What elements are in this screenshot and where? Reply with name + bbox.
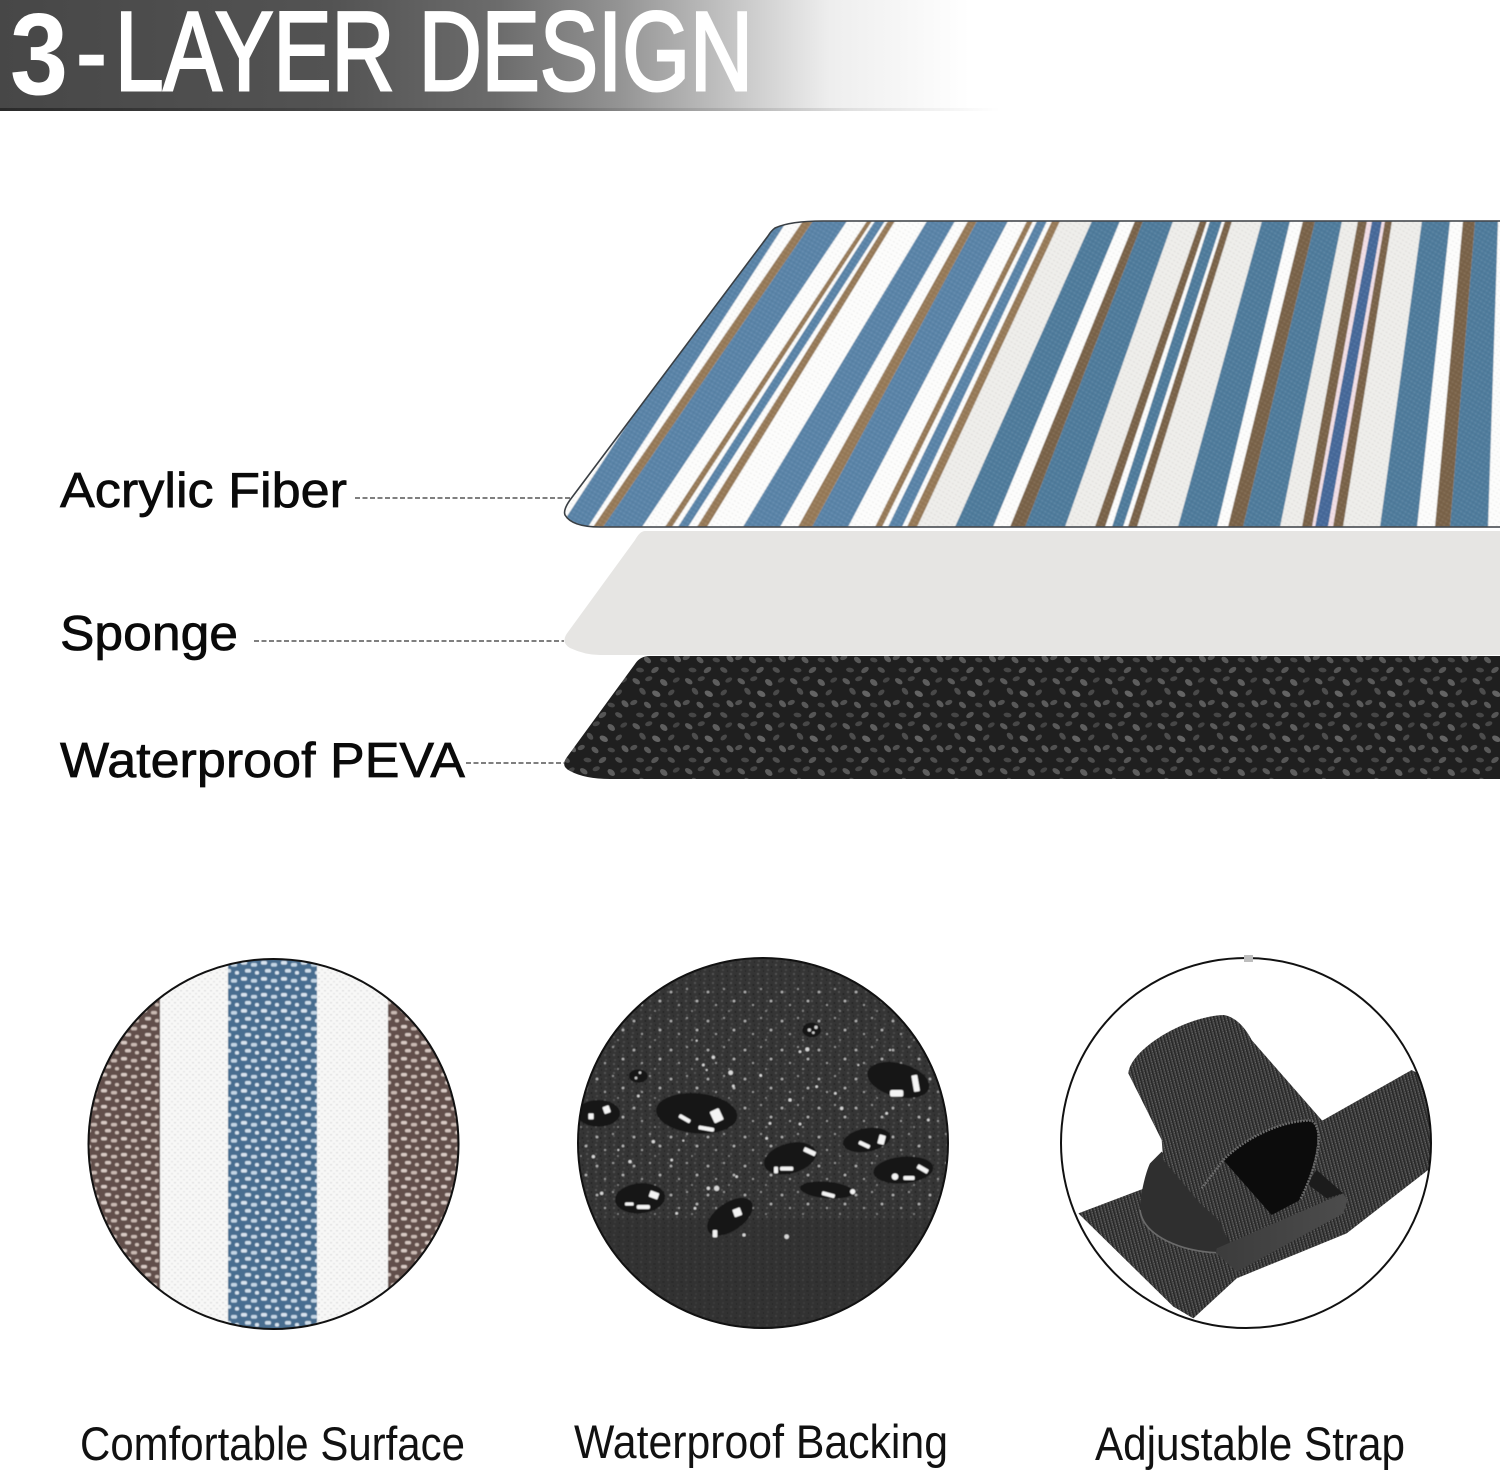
layer: acrylic fiber striped fabric <box>564 220 1500 528</box>
label: acrylic fiber: Acrylic Fiber <box>60 464 347 518</box>
caption: waterproof backing: Waterproof Backing <box>574 1415 948 1468</box>
detail circle: adjustable strap <box>1061 955 1437 1328</box>
detail circle: comfortable surface <box>88 958 460 1330</box>
buckle <box>1140 1152 1347 1272</box>
strap loop <box>1128 1015 1325 1230</box>
layer: waterproof PEVA <box>564 656 1500 779</box>
caption: adjustable strap: Adjustable Strap <box>1095 1417 1405 1470</box>
caption: comfortable surface: Comfortable Surface <box>80 1417 465 1470</box>
strap webbing <box>1078 1070 1437 1318</box>
detail circle: waterproof backing <box>577 957 949 1329</box>
water droplets <box>577 1023 934 1243</box>
label: waterproof PEVA: Waterproof PEVA <box>60 734 465 788</box>
label: sponge: Sponge <box>60 607 238 661</box>
layered mat diagram <box>550 205 1500 779</box>
title <box>10 0 753 119</box>
header banner <box>0 0 1000 119</box>
layer: sponge <box>564 531 1500 655</box>
layer labels <box>60 464 570 788</box>
